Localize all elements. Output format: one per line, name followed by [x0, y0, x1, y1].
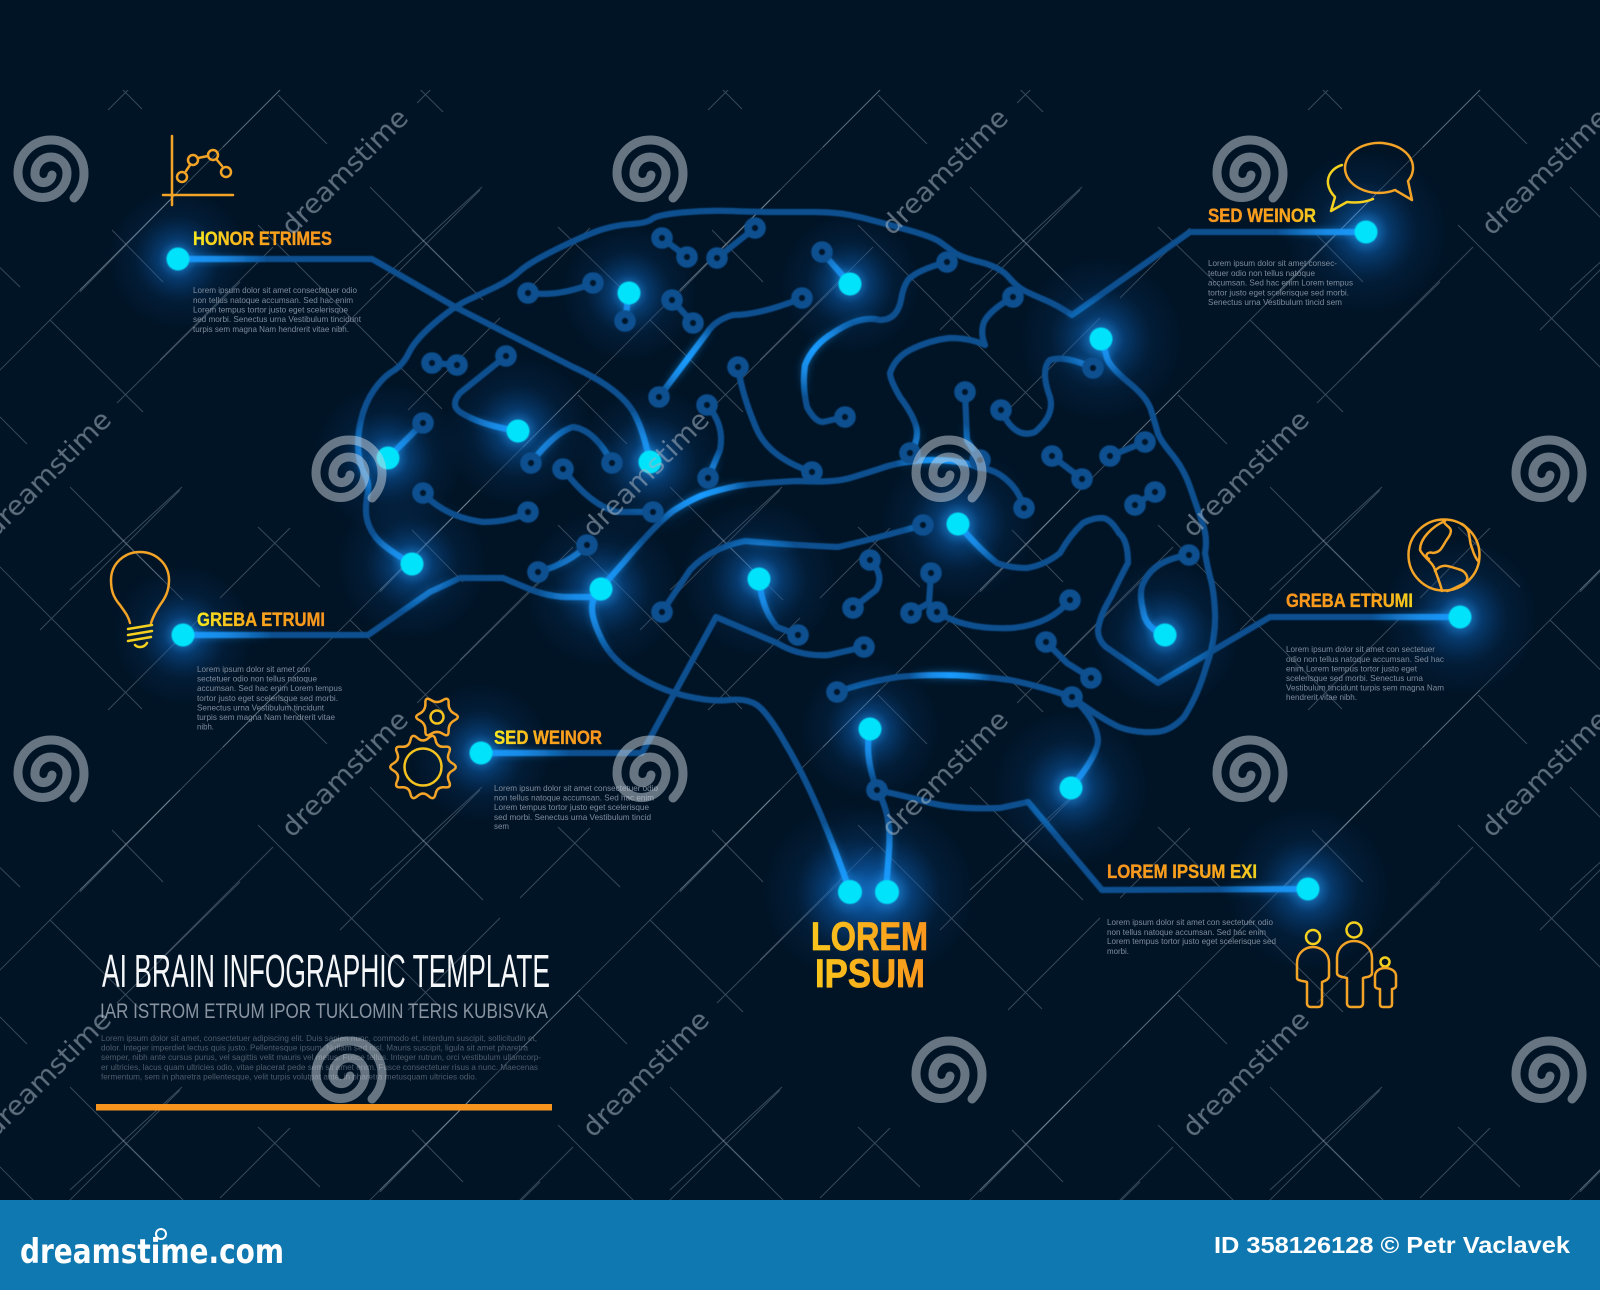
text block: morbi.: [1107, 947, 1129, 956]
watermark spirals: [18, 140, 1582, 1099]
footer logo mark: [156, 1229, 166, 1239]
heading: LOREM IPSUM EXI: [1107, 861, 1257, 883]
body text: er ultricies, lacus quam ultricies odio, vitae placerat pede sem sit amet enim. Fusce consectetuer risus a nunc. Maecenas: [101, 1062, 538, 1072]
text block: Vestibulum tincidunt turpis sem magna Nam: [1286, 684, 1444, 692]
heading: SED WEINOR: [494, 727, 602, 749]
heading: GREBA ETRUMI: [197, 609, 325, 631]
center label: lorem ipsum: LOREM: [811, 915, 928, 959]
glowing nodes: [166, 220, 1472, 904]
text block: sem: [494, 822, 509, 831]
watermark text: dreamstime: [875, 102, 1015, 242]
icon: light bulb: [111, 552, 169, 647]
text block: non tellus natoque accumsan. Sed hac enim: [1107, 928, 1266, 937]
text block: Lorem ipsum dolor sit amet con sectetuer odio: [1107, 918, 1273, 927]
text block: tortor justo eget scelerisque sed morbi.: [197, 694, 338, 703]
text block: [494, 784, 658, 831]
text block: odio non tellus natoque accumsan. Sed hac: [1286, 655, 1444, 664]
watermark text: dreamstime: [1176, 404, 1316, 544]
watermark text: dreamstime: [576, 404, 716, 544]
body text: dolor. Integer imperdiet lectus quis justo. Pellentesque ipsum. Nullam sed nisl. Mauris suscipit, ligula sit amet pharetra: [101, 1042, 528, 1052]
text block: non tellus natoque accumsan. Sed hac enim: [494, 794, 654, 802]
text block: Senectus urna Vestibulum tincidunt: [197, 704, 325, 712]
text block: tetuer odio non tellus natoque: [1208, 269, 1315, 278]
text block: Lorem ipsum dolor sit amet consec-: [1208, 259, 1337, 268]
text block: [197, 665, 342, 732]
callout: sed weinor middle: [390, 699, 658, 831]
text block: scelerisque sed morbi. Senectus urna: [1286, 674, 1423, 683]
title: AI BRAIN INFOGRAPHIC TEMPLATE: [102, 945, 550, 997]
icon: gears: [390, 699, 458, 798]
text block: accumsan. Sed hac enim Lorem tempus: [1208, 278, 1353, 288]
text block: turpis sem magna Nam hendrerit vitae nibh.: [193, 325, 349, 334]
text block: non tellus natoque accumsan. Sed hac enim: [193, 296, 353, 305]
text block: [1286, 645, 1444, 702]
text block: Lorem ipsum dolor sit amet consectetuer odio: [494, 784, 658, 793]
footer band: [0, 1200, 1600, 1290]
footer logo: dreamstime.com: [20, 1232, 284, 1272]
body text: [101, 1033, 541, 1082]
text block: Lorem tempus tortor justo eget scelerisque: [494, 803, 649, 812]
title block: [96, 945, 552, 1110]
watermark text: dreamstime: [576, 1004, 716, 1144]
watermark text: dreamstime: [275, 704, 415, 844]
center label: lorem ipsum: [811, 915, 928, 996]
heading: GREBA ETRUMI: [1286, 590, 1413, 612]
callout: lorem ipsum exi: [1107, 861, 1396, 1007]
text block: turpis sem magna Nam hendrerit vitae: [197, 713, 335, 722]
circuit ring terminals: [416, 221, 1196, 797]
orange rule: [96, 1104, 552, 1110]
text block: sed morbi. Senectus urna Vestibulum tincid: [494, 813, 651, 822]
text block: nibh.: [197, 722, 214, 732]
glow halos around nodes: [108, 150, 1538, 980]
text block: Lorem ipsum dolor sit amet con: [197, 665, 310, 674]
text block: sed morbi. Senectus urna Vestibulum tincidunt: [193, 315, 362, 324]
icon: line chart: [163, 136, 233, 205]
callout: sed weinor top right: [1208, 143, 1413, 307]
text block: [193, 286, 362, 334]
text block: hendrerit vitae nibh.: [1286, 693, 1357, 702]
text block: Lorem ipsum dolor sit amet consectetuer odio: [193, 286, 357, 295]
text block: tortor justo eget scelerisque sed morbi.: [1208, 288, 1349, 298]
body text: Lorem ipsum dolor sit amet, consectetuer adipiscing elit. Duis sapien nunc, commodo et, interdum suscipit, sollicitudin et,: [101, 1033, 537, 1043]
icon: people: [1297, 922, 1396, 1007]
heading: HONOR ETRIMES: [193, 228, 332, 250]
callout: greba etrumi left: [111, 552, 342, 732]
callout: honor etrimes: [163, 136, 362, 334]
icon: globe: [1408, 520, 1480, 591]
heading: SED WEINOR: [1208, 205, 1316, 227]
text block: Senectus urna Vestibulum tincid sem: [1208, 298, 1342, 307]
watermark text: dreamstime: [1176, 1004, 1316, 1144]
center label: lorem ipsum: IPSUM: [815, 952, 925, 996]
text block: sectetuer odio non tellus natoque: [197, 674, 317, 684]
text block: accumsan. Sed hac enim Lorem tempus: [197, 684, 342, 693]
text block: enim Lorem tempus tortor justo eget: [1286, 664, 1418, 674]
brain circuit network: [166, 211, 1472, 904]
body text: fermentum, sem in pharetra pellentesque, velit turpis volutpat ante, in pharetra metusquam ultricies odio.: [101, 1072, 477, 1082]
callout: greba etrumi right: [1286, 520, 1480, 702]
text block: Lorem ipsum dolor sit amet con sectetuer: [1286, 645, 1435, 654]
text block: [1208, 259, 1353, 307]
text block: [1107, 918, 1276, 956]
watermark text: dreamstime: [875, 704, 1015, 844]
watermark text: dreamstime: [275, 102, 415, 242]
footer credit: ID 358126128 © Petr Vaclavek: [1214, 1232, 1570, 1258]
icon: speech bubbles: [1328, 143, 1413, 211]
text block: Lorem tempus tortor justo eget scelerisque: [193, 306, 348, 314]
body text: semper, nibh ante cursus purus, vel sagittis velit mauris vel metus. Fusce tellus. Integer rutrum, orci vestibulum ullamcorp-: [101, 1052, 541, 1062]
text block: Lorem tempus tortor justo eget scelerisque sed: [1107, 937, 1276, 946]
subtitle: IAR ISTROM ETRUM IPOR TUKLOMIN TERIS KUBISVKA: [100, 1000, 548, 1023]
